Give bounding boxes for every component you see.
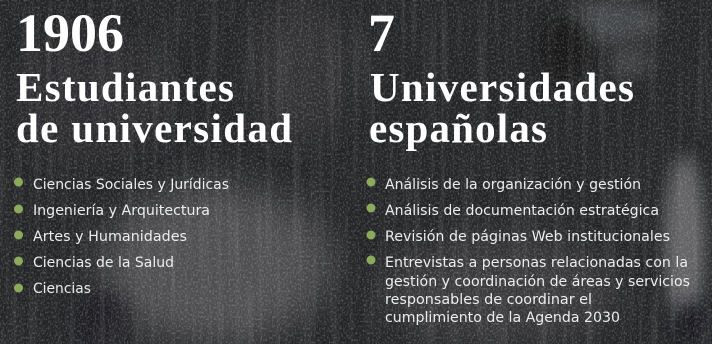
list: areas of study: Ingeniería y Arquitectura: [33, 202, 210, 219]
list: areas of study: Artes y Humanidades: [33, 228, 187, 245]
heading: Estudiantes de universidad: Estudiantes: [16, 64, 234, 110]
list: areas of study: [14, 176, 229, 297]
heading: Estudiantes de universidad: de universidad: [16, 105, 292, 151]
list: methods: cumplimiento de la Agenda 2030: [385, 309, 620, 326]
heading: Estudiantes de universidad: [16, 64, 292, 151]
heading: Universidades españolas: españolas: [369, 105, 547, 151]
panel: students: [14, 3, 292, 297]
panel: universities: [366, 3, 690, 326]
list: areas of study: Ciencias: [33, 280, 91, 297]
list: methods: Análisis de documentación estratégica: [385, 202, 659, 219]
list: methods: responsables de coordinar el: [385, 291, 592, 308]
list: areas of study: Ciencias Sociales y Jurídicas: [33, 176, 229, 193]
list: areas of study: Ciencias de la Salud: [33, 254, 174, 271]
list: methods: [366, 176, 690, 326]
heading: Universidades españolas: Universidades: [370, 64, 634, 110]
number: 7: 7: [368, 3, 395, 63]
list: methods: Entrevistas a personas relacionadas con la: [385, 254, 688, 271]
heading: Universidades españolas: [369, 64, 634, 151]
list: methods: gestión y coordinación de áreas y servicios: [385, 273, 690, 290]
number: 1906: 1906: [16, 3, 124, 63]
list: methods: Revisión de páginas Web institucionales: [385, 228, 670, 245]
list: methods: Análisis de la organización y gestión: [385, 176, 641, 193]
